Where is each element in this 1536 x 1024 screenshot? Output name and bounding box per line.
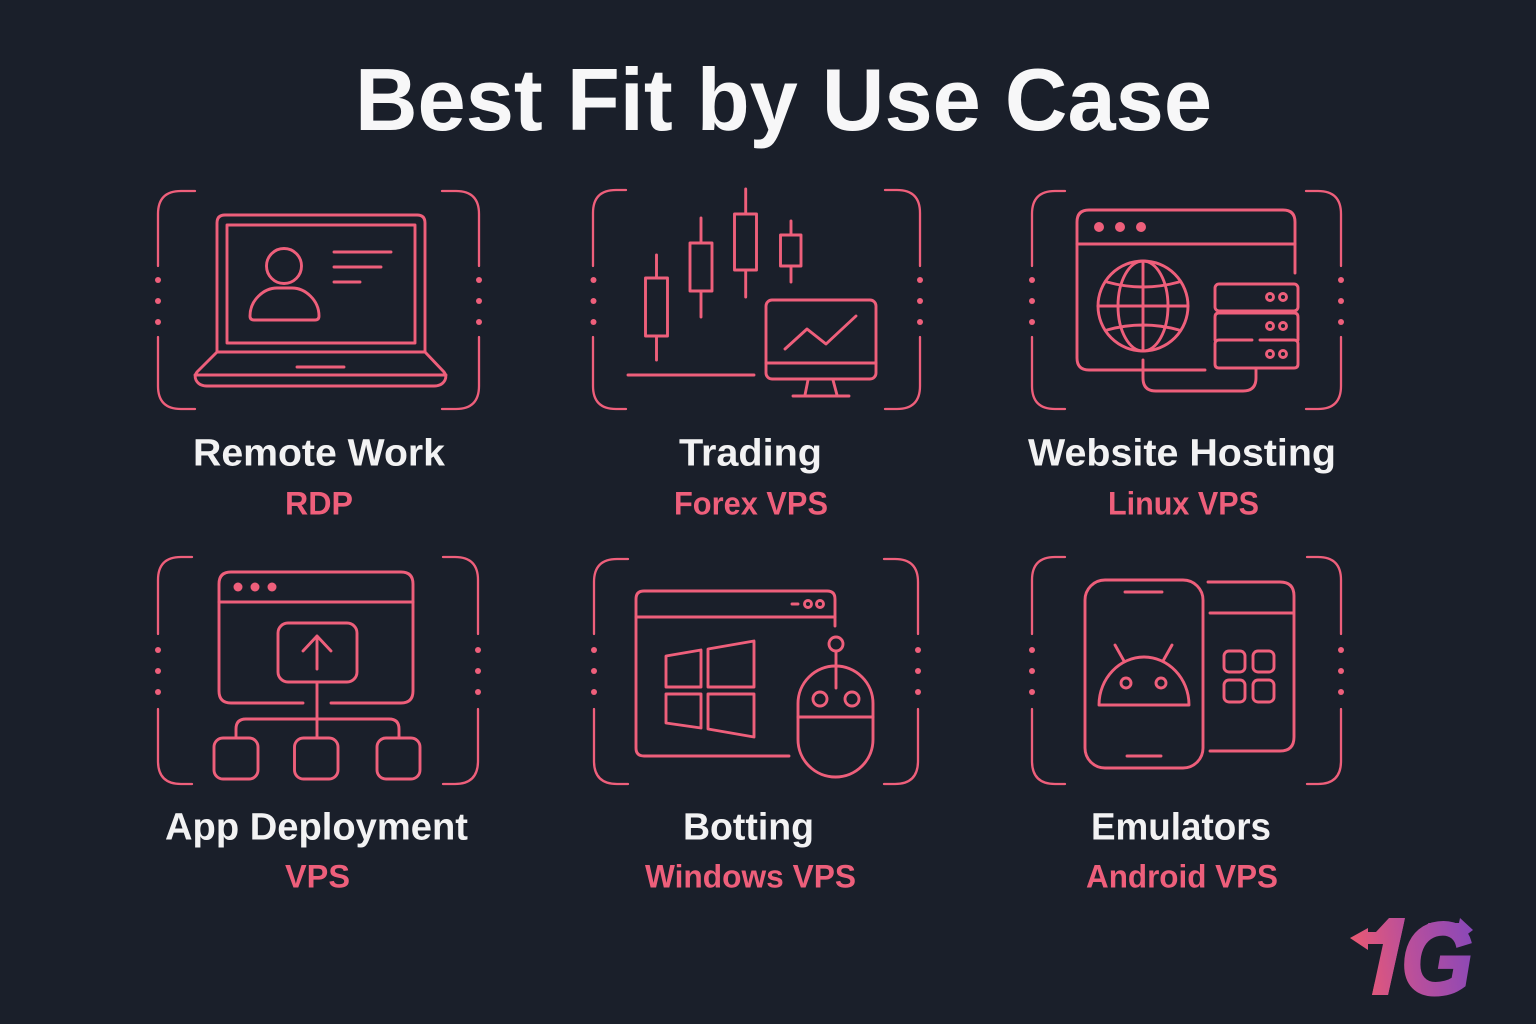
frame: website hosting: [1029, 191, 1344, 409]
panel: emulators: [1029, 557, 1344, 894]
sublabel: RDP: RDP: [285, 486, 353, 522]
panel: app deployment: [155, 557, 481, 894]
frame: emulators: [1029, 557, 1344, 784]
icon: browser with globe and server: [1077, 210, 1298, 391]
sublabel: linux vps: Linux VPS: [1108, 486, 1259, 522]
icon: browser upload and deployment tree: [214, 572, 420, 779]
label: app deployment: App Deployment: [165, 806, 468, 848]
label: emulators: Emulators: [1091, 806, 1271, 848]
label: remote work: Remote Work: [193, 432, 446, 474]
frame: trading: [590, 190, 923, 409]
logo: 1G with arrows: 1: [1362, 896, 1414, 1019]
frame: botting: [591, 559, 921, 784]
sublabel: forex vps: Forex VPS: [674, 486, 828, 522]
logo: 1G with arrows: [1350, 918, 1473, 996]
logo: 1G with arrows: G: [1401, 902, 1473, 1016]
label: website hosting: Website Hosting: [1028, 432, 1336, 474]
sublabel: windows vps: Windows VPS: [645, 858, 856, 894]
panel: website hosting: [1028, 191, 1344, 522]
sublabel: android vps: Android VPS: [1086, 858, 1278, 894]
panel: remote work: [155, 191, 482, 522]
sublabel: vps: VPS: [285, 858, 350, 894]
panel: trading: [590, 189, 923, 522]
title: Best Fit by Use Case: [355, 50, 1212, 149]
panel: botting: [591, 559, 921, 894]
frame: remote work: [155, 191, 482, 409]
icon: laptop with user profile: [195, 215, 446, 386]
icon: windows browser with robot mouse: [636, 591, 873, 777]
icon: candlestick chart and monitor: [628, 189, 876, 396]
label: trading: Trading: [679, 432, 822, 474]
frame: app deployment: [155, 557, 481, 784]
icon: android phone and app window: [1085, 580, 1294, 768]
label: botting: Botting: [683, 806, 814, 848]
